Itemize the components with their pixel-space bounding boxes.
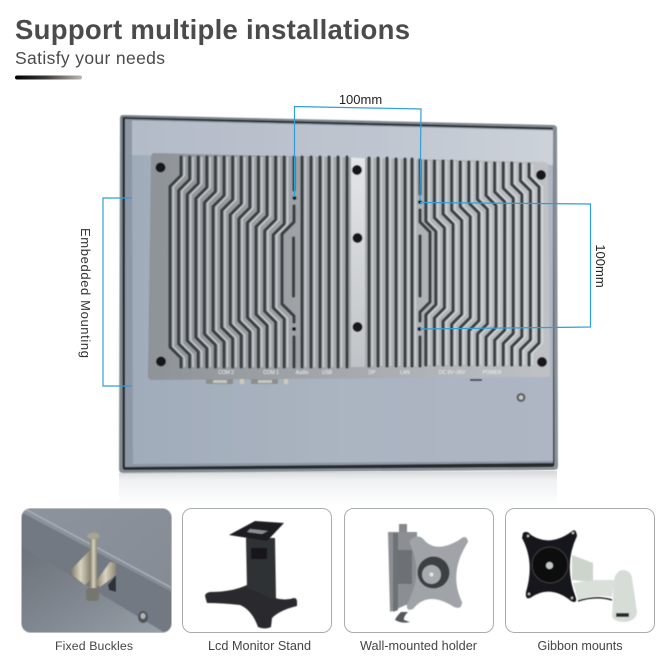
port labels: Audio [296,370,309,376]
heat sink fin highlights [173,157,542,367]
monitor inner black bezel [122,117,554,470]
dimension: top 100mm: 100mm [339,92,382,107]
port labels: POWER [483,370,502,376]
panel: gibbon mounts [506,508,654,653]
panel: wall-mounted holder [344,508,494,653]
caption: Wall-mounted holder [360,639,478,653]
panel border [344,508,494,632]
port labels [218,370,502,376]
port labels: DP [369,370,376,376]
plate top highlight band [132,120,553,165]
subtitle: Satisfy your needs [15,48,165,68]
port labels: DC 9V~36V [439,370,466,376]
port labels: COM 2 [218,370,234,376]
monitor back plate [132,120,553,464]
COM connectors [206,379,482,384]
grounding screw [516,393,526,402]
photo: buckle on panel edge [21,508,172,633]
port labels: USB [322,370,333,376]
heat sink centre bar [351,158,365,367]
caption: Fixed Buckles [55,639,133,653]
dimension: top 100mm [294,92,421,201]
port labels: COM 1 [263,370,279,376]
icon: gibbon arm mount [522,530,637,622]
panel: lcd monitor stand [182,508,332,653]
monitor reflection [119,471,557,506]
caption: Lcd Monitor Stand [208,639,311,653]
monitor outer frame [119,115,558,473]
caption: Gibbon mounts [538,639,622,653]
title underline bar [15,76,82,80]
heat sink fin grooves [170,157,539,367]
icon: monitor stand [205,521,297,628]
dimension: right 100mm: 100mm [593,244,608,288]
title: Support multiple installations [15,14,410,45]
dimension: embedded mounting [78,198,132,386]
dimension: embedded mounting: Embedded Mounting [78,228,93,358]
monitor rear view [119,115,558,473]
monitor side rim [125,119,553,467]
mounting and corner holes [156,162,547,367]
icon: wall mount bracket [388,524,468,623]
dimension: right 100mm [420,202,608,329]
heat sink body [148,153,550,380]
panel border [22,508,172,632]
panel border [182,508,332,632]
port labels: LAN [400,370,410,376]
panel border [506,508,654,632]
panel: fixed buckles [21,508,172,653]
